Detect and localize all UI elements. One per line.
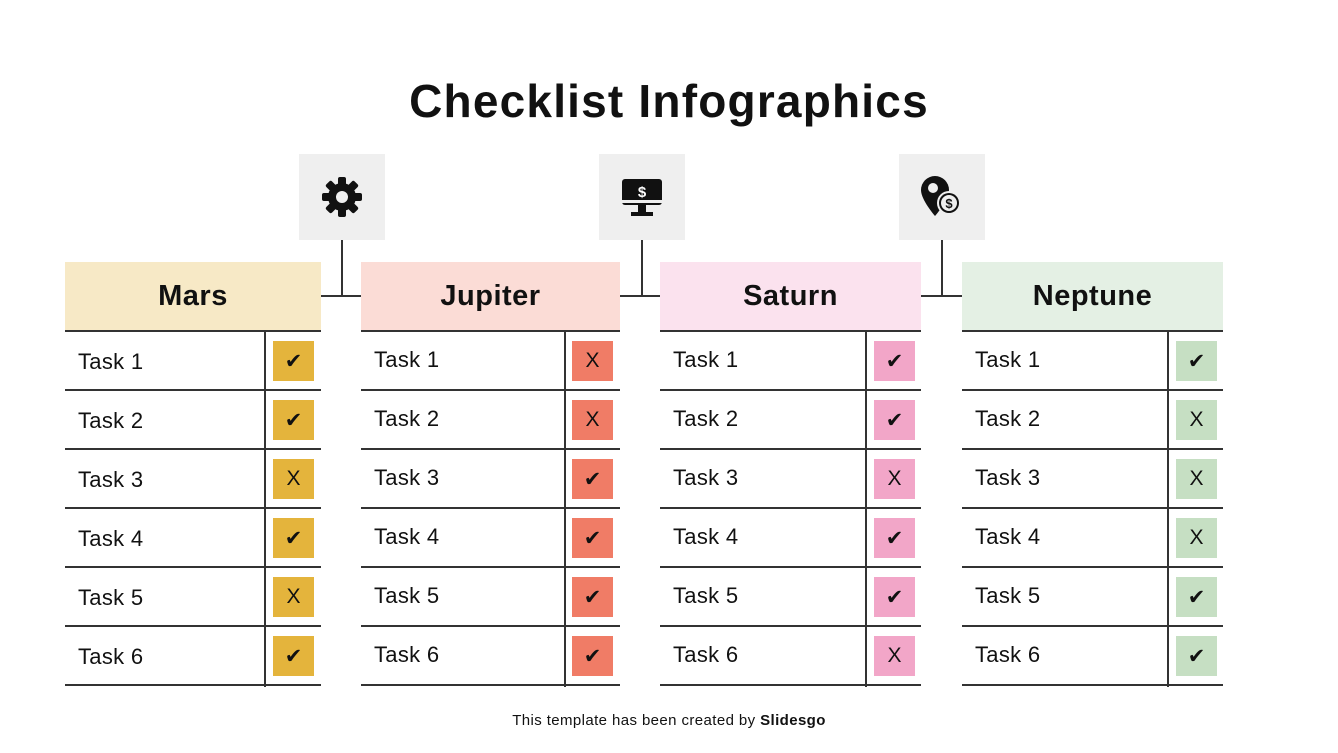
connector: saturn-neptune xyxy=(941,240,943,297)
table: Neptune: Task 1 xyxy=(975,347,1040,372)
table: Jupiter: Task 3 xyxy=(374,465,439,490)
title: Checklist Infographics xyxy=(409,75,929,127)
table: Jupiter: X xyxy=(585,349,600,372)
table: Mars: ✔ xyxy=(285,350,302,372)
table: Neptune: ✔ xyxy=(1188,644,1205,668)
footer credit: This template has been created by Slidesgo xyxy=(512,712,826,729)
table: Saturn: Task 1 xyxy=(673,347,738,372)
header: Neptune: Neptune xyxy=(1033,280,1152,312)
table: Mars: Task 5 xyxy=(78,585,143,610)
table: Jupiter xyxy=(361,330,620,687)
table: Saturn: Task 5 xyxy=(673,583,738,608)
table: Mars: Task 4 xyxy=(78,526,143,551)
header: Mars: Mars xyxy=(158,280,228,312)
table: Neptune: Task 6 xyxy=(975,642,1040,667)
connector: mars-jupiter xyxy=(341,240,343,297)
header: Mars xyxy=(65,262,321,330)
table: Saturn: X xyxy=(887,467,902,490)
icon: gear xyxy=(299,154,385,240)
icon: location dollar: $ xyxy=(945,196,953,211)
table: Mars: Task 2 xyxy=(78,408,143,433)
table: Neptune: Task 3 xyxy=(975,465,1040,490)
table: Saturn: Task 3 xyxy=(673,465,738,490)
icon: monitor dollar: $ xyxy=(638,184,647,201)
icon: monitor dollar xyxy=(599,154,685,240)
table: Mars: Task 1 xyxy=(78,349,143,374)
table: Mars: ✔ xyxy=(285,408,302,432)
table: Saturn: Task 4 xyxy=(673,524,738,549)
table: Neptune: ✔ xyxy=(1188,350,1205,372)
table: Neptune: X xyxy=(1189,526,1204,549)
table: Mars: ✔ xyxy=(285,644,302,668)
table: Jupiter: Task 6 xyxy=(374,642,439,667)
header: Saturn xyxy=(660,262,921,330)
header: Jupiter xyxy=(361,262,620,330)
table: Neptune: ✔ xyxy=(1188,586,1205,608)
table: Saturn: ✔ xyxy=(886,350,903,372)
table: Saturn: X xyxy=(887,644,902,667)
table: Jupiter: Task 4 xyxy=(374,524,439,549)
table: Neptune: Task 4 xyxy=(975,524,1040,549)
table: Neptune: Task 2 xyxy=(975,406,1040,431)
table: Jupiter: Task 2 xyxy=(374,406,439,431)
table: Jupiter: ✔ xyxy=(584,586,601,608)
table: Neptune: X xyxy=(1189,408,1204,431)
table: Jupiter: Task 5 xyxy=(374,583,439,608)
table: Saturn: ✔ xyxy=(886,408,903,432)
table: Saturn: Task 6 xyxy=(673,642,738,667)
table: Neptune xyxy=(962,330,1223,687)
table: Saturn: ✔ xyxy=(886,526,903,550)
connector: jupiter-saturn xyxy=(641,240,643,297)
header: Jupiter: Jupiter xyxy=(440,280,541,312)
table: Neptune: X xyxy=(1189,467,1204,490)
table: Mars: X xyxy=(286,585,300,608)
header: Saturn: Saturn xyxy=(743,280,838,312)
table: Jupiter: ✔ xyxy=(584,526,601,550)
table: Jupiter: Task 1 xyxy=(374,347,439,372)
table: Mars: X xyxy=(286,467,300,490)
table: Mars xyxy=(65,330,321,687)
table: Mars: Task 3 xyxy=(78,467,143,492)
table: Neptune: Task 5 xyxy=(975,583,1040,608)
header: Neptune xyxy=(962,262,1223,330)
table: Saturn xyxy=(660,330,921,687)
table: Mars: Task 6 xyxy=(78,644,143,669)
table: Saturn: Task 2 xyxy=(673,406,738,431)
icon: location dollar xyxy=(899,154,985,240)
table: Jupiter: X xyxy=(585,408,600,431)
table: Jupiter: ✔ xyxy=(584,644,601,668)
table: Mars: ✔ xyxy=(285,526,302,550)
table: Jupiter: ✔ xyxy=(584,468,601,490)
table: Saturn: ✔ xyxy=(886,586,903,608)
